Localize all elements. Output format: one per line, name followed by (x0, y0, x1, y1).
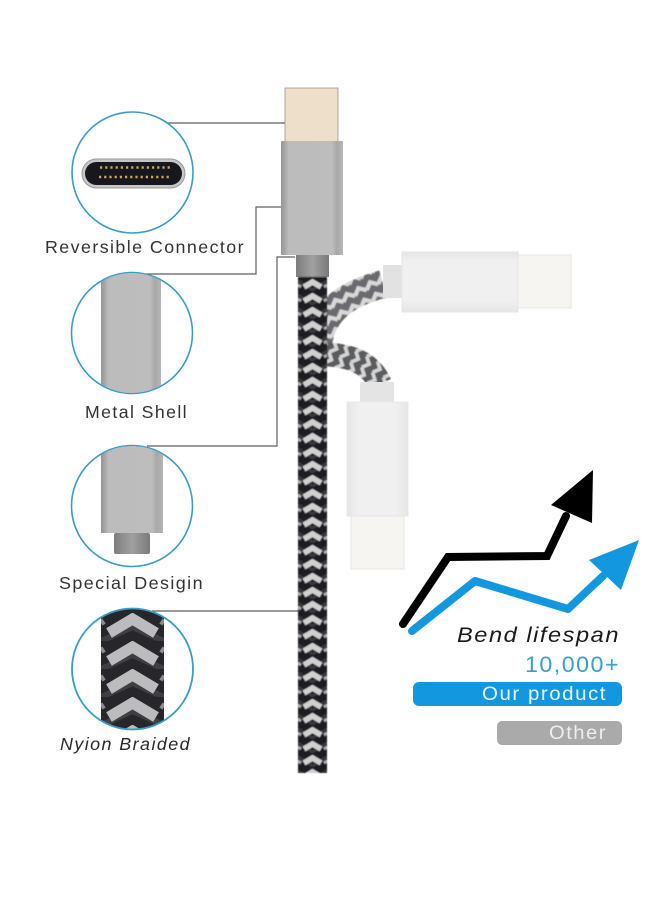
upper connector tip (518, 255, 571, 308)
bar: Our product: Our product (482, 684, 607, 705)
upper strain relief (383, 265, 403, 298)
legend (413, 623, 622, 745)
arrow: blue lifespan (412, 540, 639, 631)
neck (296, 255, 329, 277)
lower strain relief (360, 382, 394, 402)
arrow: black lifespan (403, 470, 593, 624)
braid close-up (101, 609, 164, 729)
infographic canvas (46, 88, 639, 774)
main cable (281, 88, 343, 773)
panel: metal shell (72, 272, 192, 422)
leader lines (145, 123, 298, 611)
bar: Our product (413, 682, 622, 706)
circle outline (72, 446, 192, 566)
bar: Other: Other (549, 723, 607, 744)
bent cable upper with white connector (318, 252, 571, 345)
shell and neck close-up (101, 446, 163, 554)
text: Bend lifespan: Bend lifespan (457, 623, 620, 647)
lower bent braid (315, 354, 380, 384)
text: 10,000+: 10,000+ (525, 652, 620, 677)
braided cable (298, 277, 327, 773)
label: Metal Shell: Metal Shell (85, 402, 188, 422)
panel: nylon braided (60, 608, 193, 754)
upper white shell (402, 252, 518, 312)
panel: reversible connector (45, 112, 245, 257)
panel: special design (59, 446, 204, 593)
label: Reversible Connector: Reversible Connector (45, 237, 245, 257)
connector tip (285, 88, 338, 142)
circle outline (72, 112, 193, 233)
label: Special Desigin: Special Desigin (59, 573, 204, 593)
circle outline (72, 608, 193, 730)
shell close-up (101, 273, 161, 393)
label: Nyion Braided: Nyion Braided (60, 734, 191, 754)
bent cable lower with white connector (315, 354, 408, 569)
upper bent braid (318, 284, 383, 345)
metal shell (281, 141, 343, 255)
lower connector tip (351, 516, 404, 569)
circle outline (72, 272, 192, 394)
bar: Other (497, 721, 622, 745)
icon: USB-C port (82, 159, 185, 188)
lower white shell (347, 402, 408, 516)
